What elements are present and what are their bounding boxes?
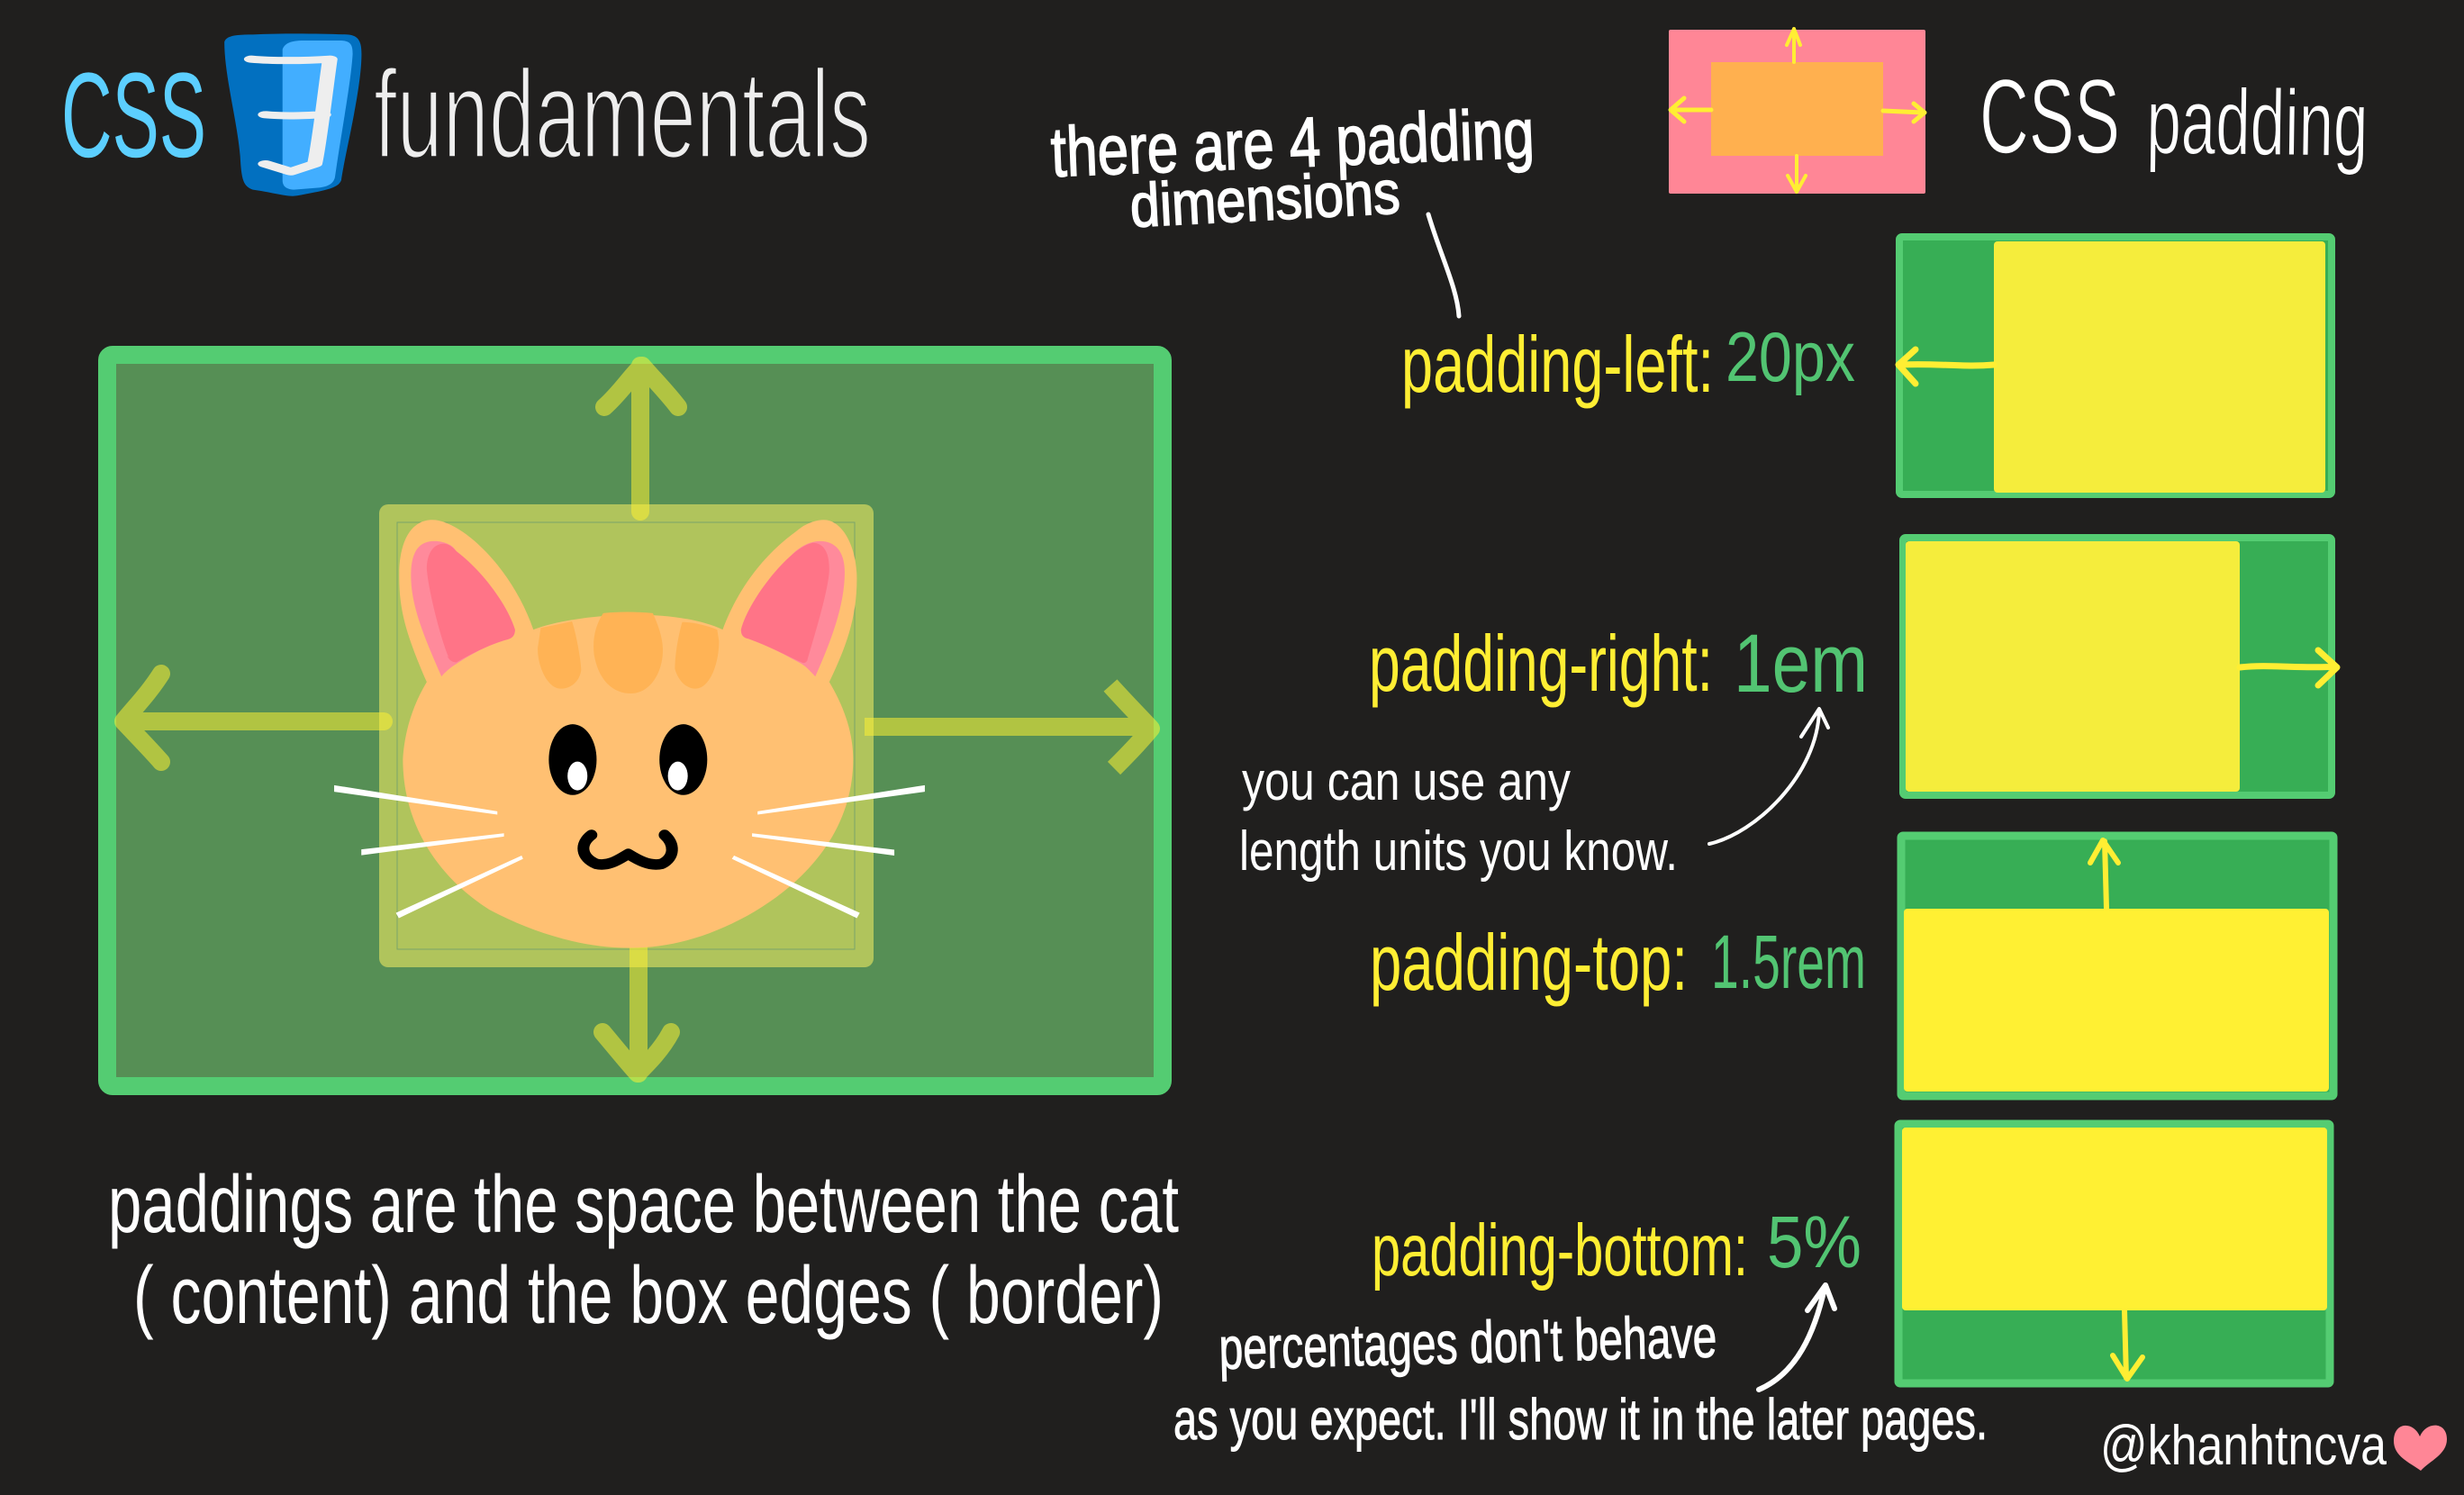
icon: CSS3 shield — [224, 33, 361, 196]
note: length units: length units you know. — [1239, 820, 1678, 883]
box: padding-left diagram — [1898, 237, 2332, 494]
row: padding-bottom — [1372, 1124, 2330, 1383]
label: padding-bottom: padding-bottom: — [1372, 1210, 1748, 1291]
caption: what paddings are: ( content) and the box edges ( border) — [133, 1251, 1164, 1341]
label: padding-left: padding-left: — [1401, 320, 1714, 409]
box: padding-right diagram — [1903, 538, 2337, 795]
arrow: note to 1em — [1709, 709, 1828, 844]
note: percentages: percentages don't behave — [1218, 1303, 1717, 1382]
value: 5%: 5% — [1767, 1201, 1862, 1283]
panel: padding diagram with cat — [107, 355, 1163, 1086]
value: 1.5rem: 1.5rem — [1711, 920, 1866, 1004]
row: padding-left — [1401, 237, 2332, 494]
note: percentages: as you expect. I'll show it in the later pages. — [1173, 1387, 1988, 1452]
heading: CSS padding — [1979, 58, 2369, 177]
row: padding-top — [1370, 836, 2333, 1096]
arrow: padding left — [123, 674, 384, 762]
box: padding-top diagram — [1901, 836, 2333, 1096]
arrow: padding up — [604, 366, 678, 512]
note: percentages — [1173, 1303, 1988, 1452]
signature: @khanhtncva: @khanhtncva — [2100, 1415, 2387, 1477]
title word: CSS: CSS — [61, 49, 206, 183]
label: padding-right: padding-right: — [1369, 619, 1713, 708]
value: 20px: 20px — [1726, 317, 1855, 396]
outer padding box with border — [107, 355, 1163, 1086]
pointer line from note — [1428, 214, 1459, 316]
note: length units — [1239, 751, 1678, 883]
icon: cat face — [334, 520, 925, 948]
title word: fundamentals: fundamentals — [374, 43, 871, 185]
heading: CSS padding: CSS — [1979, 58, 2120, 177]
caption: what paddings are: paddings are the space between the cat — [108, 1160, 1179, 1250]
note: length units: you can use any — [1242, 751, 1571, 811]
arrow: padding down — [602, 948, 671, 1074]
title: CSS3 fundamentals — [61, 33, 871, 196]
value: 1em: 1em — [1734, 618, 1868, 710]
label: padding-top: padding-top: — [1370, 918, 1688, 1007]
row: padding-right — [1369, 538, 2337, 795]
arrow: note to 5% — [1759, 1285, 1834, 1390]
box: padding-bottom diagram — [1898, 1124, 2330, 1383]
note: there are 4 padding dimensions: dimensions — [1128, 158, 1401, 240]
arrow: padding right — [865, 685, 1151, 768]
caption: what paddings are — [108, 1160, 1179, 1341]
note: there are 4 padding dimensions — [1049, 94, 1535, 240]
icon: heart — [2394, 1426, 2447, 1471]
icon: padding box with four arrows — [1669, 29, 1925, 194]
content box behind cat — [379, 504, 874, 967]
note: there are 4 padding dimensions: there are 4 padding — [1049, 94, 1535, 192]
